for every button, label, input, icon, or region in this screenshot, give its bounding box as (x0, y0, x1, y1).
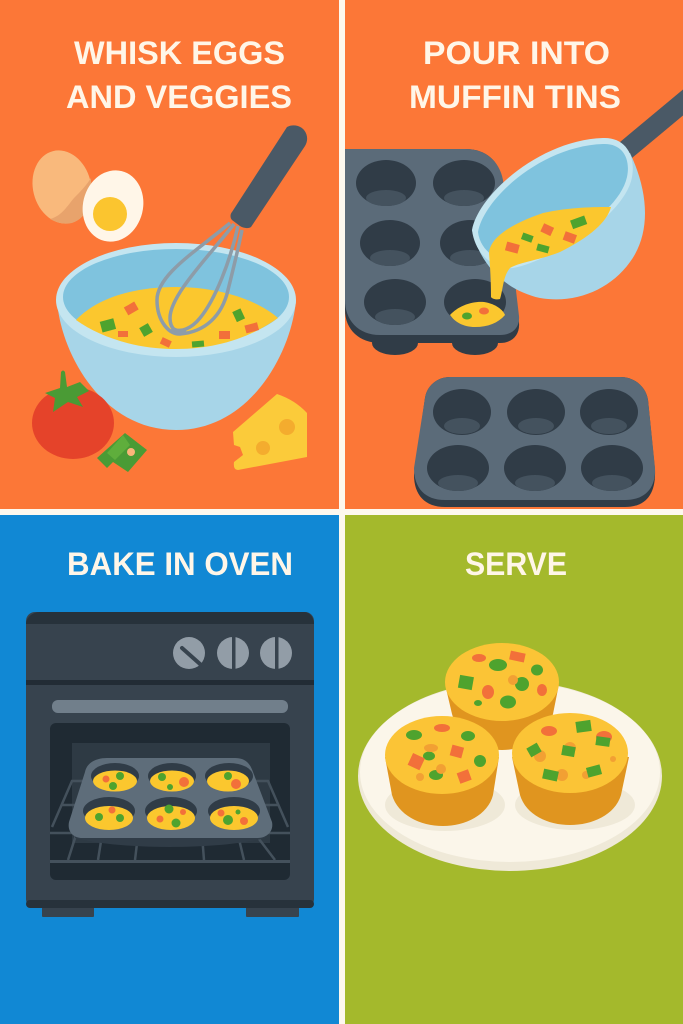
heading: whisk eggs and veggies: AND VEGGIES (66, 79, 292, 115)
heading: whisk eggs and veggies (66, 35, 292, 115)
vegetable pieces in bowl (100, 302, 259, 348)
icon: whole egg (25, 144, 99, 230)
heading: pour into muffin tins: POUR INTO (423, 35, 610, 71)
muffin tray (69, 758, 272, 847)
icon: halved boiled egg (75, 164, 151, 248)
heading: serve: SERVE (465, 546, 567, 582)
heading: pour into muffin tins: MUFFIN TINS (409, 79, 621, 115)
heading: pour into muffin tins (409, 35, 621, 115)
icon: muffin right (512, 713, 629, 825)
icon: tomato (32, 370, 114, 459)
icon: oven (26, 612, 314, 917)
oven handle (52, 700, 288, 713)
oven knobs (173, 637, 292, 669)
egg mixture (76, 287, 278, 349)
icon: muffin left (385, 716, 499, 826)
icon: muffin tin being filled (345, 149, 519, 355)
icon: empty muffin tin (414, 377, 655, 507)
oven window (50, 723, 290, 880)
heading: bake in oven: BAKE IN OVEN (67, 546, 293, 582)
icon: muffin top (445, 643, 559, 750)
panel: serve (345, 515, 683, 1024)
icon: green pepper (97, 433, 147, 472)
panel: whisk eggs and veggies (0, 0, 339, 509)
icon: plate (358, 681, 662, 871)
heading: whisk eggs and veggies: WHISK EGGS (74, 35, 285, 71)
batter in muffin cup (450, 302, 505, 327)
panel: pour into muffin tins (345, 0, 683, 509)
icon: mixing bowl (56, 243, 296, 430)
icon: cheese wedge (233, 394, 307, 470)
batter stream (489, 207, 611, 299)
oven rack (50, 781, 290, 863)
icon: tilted bowl pouring (472, 95, 683, 299)
panel: bake in oven (0, 515, 339, 1024)
icon: whisk (157, 125, 307, 334)
